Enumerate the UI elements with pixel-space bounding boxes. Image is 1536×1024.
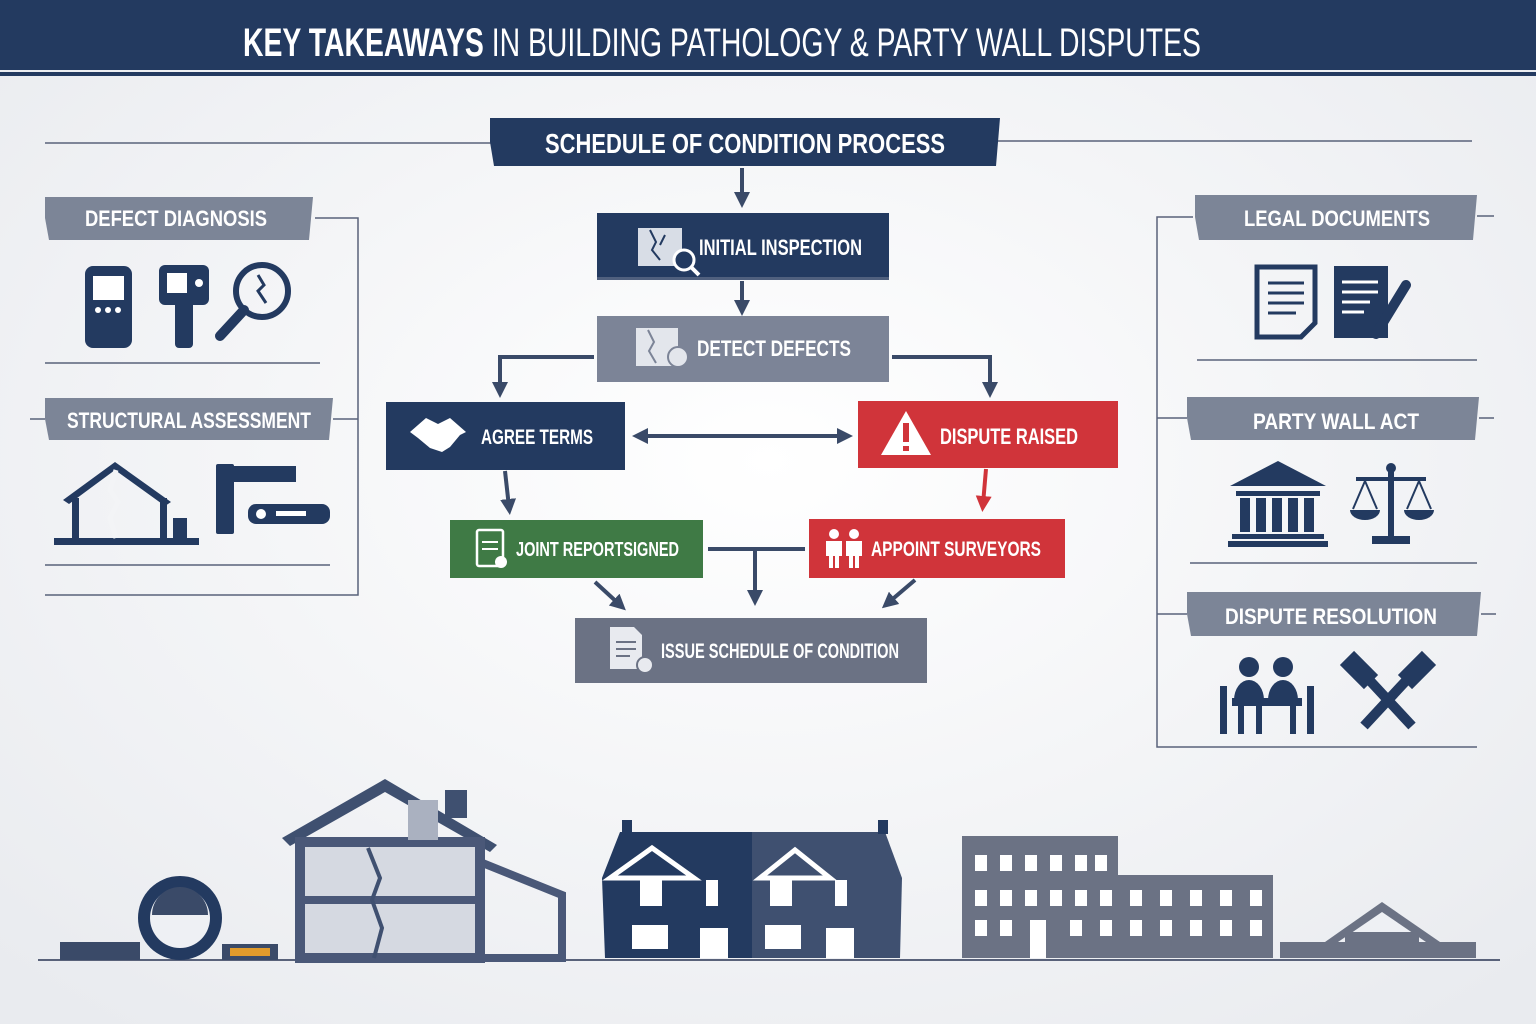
banner: schedule of condition process: SCHEDULE OF CONDITION PROCESS	[545, 128, 945, 159]
box: agree terms: AGREE TERMS	[481, 426, 593, 449]
tape measure	[60, 876, 278, 960]
icon: defect	[636, 328, 688, 367]
icon: warning	[881, 411, 931, 455]
house cutaway	[282, 779, 562, 958]
banner: party wall act	[1187, 397, 1479, 440]
header bar	[0, 0, 1536, 76]
title: KEY TAKEAWAYS IN BUILDING PATHOLOGY & PARTY WALL DISPUTES	[243, 21, 1201, 65]
icons: house crack and level	[54, 462, 330, 545]
box: dispute raised: DISPUTE RAISED	[940, 424, 1078, 449]
small house	[1280, 902, 1476, 958]
banner: structural assessment	[45, 398, 333, 440]
banner: dispute resolution: DISPUTE RESOLUTION	[1225, 604, 1437, 629]
box: detect defects	[597, 316, 889, 382]
icons: diagnosis tools	[85, 265, 288, 348]
box: joint report signed	[450, 520, 703, 578]
banner: defect diagnosis	[45, 197, 313, 240]
banner: defect diagnosis: DEFECT DIAGNOSIS	[85, 206, 267, 231]
icons: meeting and gavels	[1220, 651, 1436, 734]
box: joint report signed: JOINT REPORTSIGNED	[516, 539, 679, 561]
box: detect defects: DETECT DEFECTS	[697, 336, 851, 361]
banner: legal documents	[1195, 195, 1477, 240]
icon: people	[826, 529, 862, 568]
box: dispute raised	[858, 401, 1118, 468]
townhouses	[602, 820, 902, 958]
banner: schedule of condition process	[490, 118, 1000, 166]
banner: dispute resolution	[1187, 592, 1481, 636]
icons: documents	[1257, 266, 1406, 338]
icon: handshake	[410, 418, 466, 452]
banner: legal documents: LEGAL DOCUMENTS	[1244, 206, 1430, 231]
icon: cracked map magnifier	[638, 228, 699, 275]
banner: party wall act: PARTY WALL ACT	[1253, 409, 1419, 434]
box: initial inspection: INITIAL INSPECTION	[699, 235, 862, 260]
box: issue schedule of condition	[575, 618, 927, 683]
box: agree terms	[386, 402, 625, 470]
box: initial inspection	[597, 213, 889, 280]
skyline illustration	[38, 779, 1500, 960]
icon: document	[610, 627, 653, 673]
icons: courthouse and scales	[1228, 461, 1434, 547]
box: appoint surveyors	[809, 519, 1065, 578]
apartment block	[962, 836, 1273, 958]
box: issue schedule of condition: ISSUE SCHEDULE OF CONDITION	[661, 640, 899, 663]
banner: structural assessment: STRUCTURAL ASSESSMENT	[67, 408, 311, 433]
flow arrows	[500, 168, 990, 605]
icon: clipboard	[477, 530, 507, 568]
box: appoint surveyors: APPOINT SURVEYORS	[871, 538, 1041, 561]
